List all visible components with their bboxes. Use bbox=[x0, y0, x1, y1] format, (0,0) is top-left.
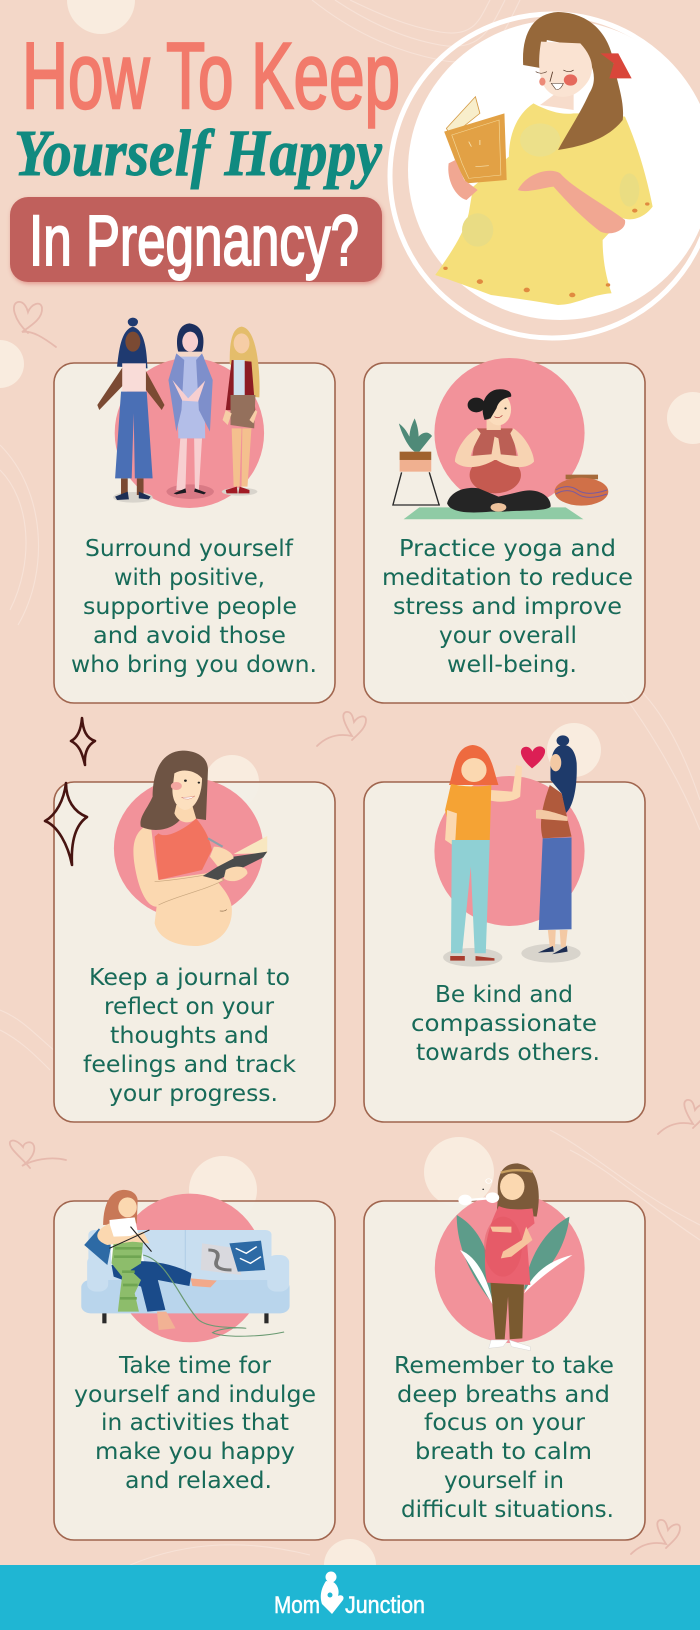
text: remember to take deep breaths: breath to calm bbox=[415, 1439, 592, 1465]
text: surround yourself: supportive people bbox=[83, 594, 297, 620]
text: remember to take deep breaths: deep breaths and bbox=[397, 1382, 610, 1408]
text: take time: in activities that bbox=[101, 1410, 289, 1436]
text: keep a journal: feelings and track bbox=[83, 1052, 297, 1078]
illustration: woman knitting on sofa bbox=[81, 1190, 290, 1342]
card 2: yoga and meditation bbox=[382, 358, 633, 678]
text: remember to take deep breaths: yourself in bbox=[444, 1468, 564, 1494]
illustration: three women bbox=[97, 318, 264, 508]
text: take time: make you happy bbox=[95, 1439, 295, 1465]
text: be kind: compassionate bbox=[411, 1011, 597, 1037]
card 4: kindness bbox=[411, 735, 600, 1066]
text: keep a journal: reflect on your bbox=[104, 994, 275, 1020]
logo wordmark: Mom: Mom bbox=[274, 1592, 320, 1619]
card 1: supportive people bbox=[71, 318, 317, 678]
text: keep a journal: your progress. bbox=[109, 1081, 278, 1107]
text: practice yoga: Practice yoga and bbox=[399, 536, 616, 562]
illustration: two women and heart bbox=[434, 735, 585, 967]
text: practice yoga: stress and improve bbox=[393, 594, 622, 620]
text: be kind: Be kind and bbox=[435, 982, 573, 1008]
illustration: breathing woman with leaves bbox=[435, 1163, 585, 1351]
text: take time: yourself and indulge bbox=[74, 1382, 316, 1408]
title pill: In Pregnancy?: In Pregnancy? bbox=[29, 202, 359, 281]
footer band with MomJunction logo bbox=[0, 1565, 700, 1630]
logo wordmark: Junction: Junction bbox=[345, 1592, 425, 1619]
title pill: In Pregnancy? bbox=[10, 197, 382, 282]
illustration: journaling woman bbox=[114, 751, 267, 946]
card 3: journal bbox=[45, 718, 297, 1107]
text: surround yourself: with positive, bbox=[114, 565, 265, 591]
text: remember to take deep breaths: focus on your bbox=[424, 1410, 586, 1436]
illustration: yoga woman bbox=[393, 358, 608, 519]
text: keep a journal bbox=[83, 965, 297, 1107]
text: surround yourself bbox=[71, 536, 317, 678]
text: surround yourself: who bring you down. bbox=[71, 652, 317, 678]
text: be kind: towards others. bbox=[416, 1040, 600, 1066]
text: practice yoga: meditation to reduce bbox=[382, 565, 633, 591]
text: practice yoga: your overall bbox=[439, 623, 577, 649]
text: practice yoga: well-being. bbox=[447, 652, 577, 678]
card 6: deep breaths bbox=[394, 1163, 614, 1523]
logo icon: mother and heart bbox=[321, 1572, 344, 1614]
card 5: time for yourself bbox=[74, 1190, 316, 1494]
hero illustration: pregnant woman reading bbox=[390, 12, 700, 338]
title: Yourself Happy: Yourself Happy bbox=[14, 117, 383, 190]
text: take time: and relaxed. bbox=[125, 1468, 272, 1494]
star sparkles bbox=[45, 718, 95, 865]
text: remember to take deep breaths: difficult situations. bbox=[401, 1497, 614, 1523]
text: take time: Take time for bbox=[118, 1353, 272, 1379]
heart doodles bbox=[10, 302, 700, 1554]
card backgrounds bbox=[54, 363, 645, 1540]
text: keep a journal: thoughts and bbox=[110, 1023, 269, 1049]
text: practice yoga bbox=[382, 536, 633, 678]
text: remember to take deep breaths: Remember to take bbox=[394, 1353, 614, 1379]
text: surround yourself: and avoid those bbox=[93, 623, 286, 649]
text: keep a journal: Keep a journal to bbox=[89, 965, 290, 991]
title: How To Keep: How To Keep bbox=[22, 23, 400, 128]
text: take time bbox=[74, 1353, 316, 1494]
text: surround yourself: Surround yourself bbox=[85, 536, 294, 562]
text: remember to take deep breaths bbox=[394, 1353, 614, 1523]
text: be kind bbox=[411, 982, 600, 1066]
